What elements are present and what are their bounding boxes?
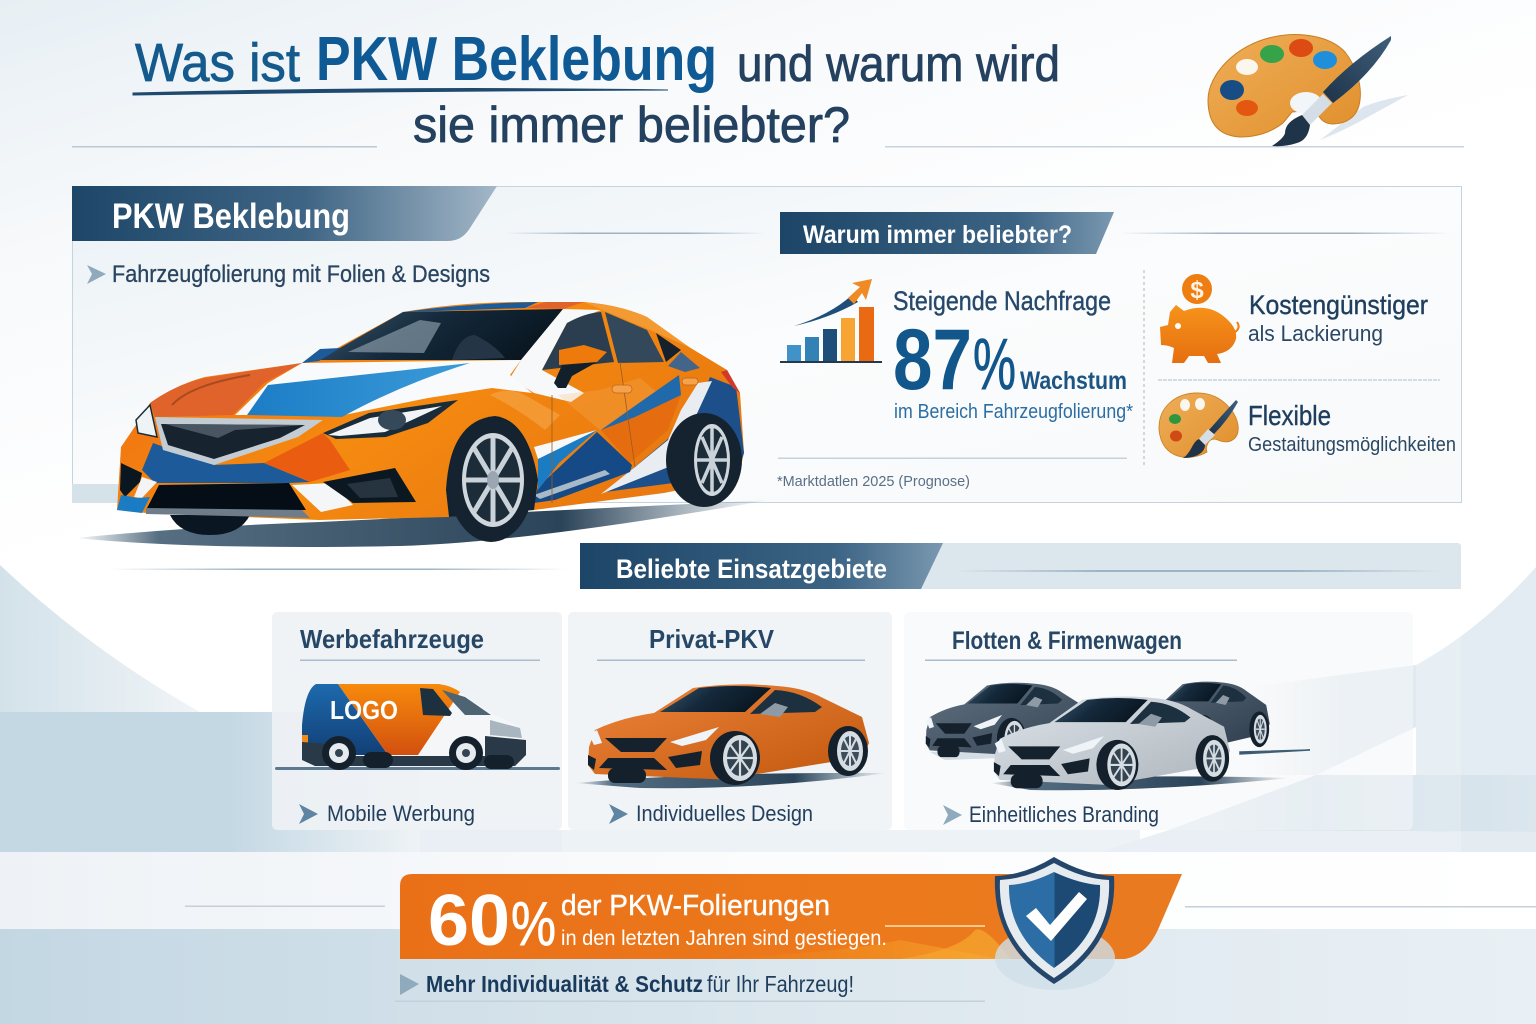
callout: mehr Individualitaet bbox=[395, 971, 985, 1002]
text: kostenguenstiger bbox=[1248, 290, 1428, 346]
icon: palette and brush bbox=[1208, 35, 1408, 146]
heading: Beliebte Einsatzgebiete: Beliebte Einsatzgebiete bbox=[616, 554, 887, 584]
van illustration: LOGO bbox=[330, 695, 398, 725]
grille bbox=[155, 417, 323, 465]
heading: PKW Beklebung bbox=[72, 186, 497, 241]
title bbox=[133, 25, 1060, 153]
title: und warum wird bbox=[737, 36, 1060, 92]
heading: PKW Beklebung: PKW Beklebung bbox=[112, 197, 350, 236]
card: Flotten und Firmenwagen: Flotten & Firmenwagen bbox=[952, 627, 1182, 655]
underbody wheels bbox=[170, 515, 250, 535]
banner: 60 percent: in den letzten Jahren sind gestiegen. bbox=[561, 927, 887, 950]
card: Werbefahrzeuge: Werbefahrzeuge bbox=[300, 624, 484, 654]
white pillar and door front bbox=[510, 309, 601, 402]
title: sie immer beliebter? bbox=[413, 97, 850, 153]
section band bbox=[910, 543, 1461, 589]
side mirror bbox=[554, 345, 607, 388]
text: steigende Nachfrage: Steigende Nachfrage bbox=[893, 286, 1111, 316]
title: PKW Beklebung bbox=[316, 25, 717, 94]
fleet cars bbox=[926, 682, 1310, 790]
header rules bbox=[72, 146, 1464, 148]
section background bbox=[562, 589, 1461, 852]
title: Was ist bbox=[135, 33, 300, 93]
caption: einheitliches Branding: Einheitliches Branding bbox=[969, 802, 1159, 827]
banner: 60 percent: % bbox=[511, 890, 556, 959]
rear wheel bbox=[666, 413, 742, 507]
text: flexible bbox=[1248, 400, 1456, 456]
stat: 87 percent bbox=[893, 312, 1127, 408]
panel: PKW Beklebung bbox=[72, 186, 1462, 503]
text: flexible: Flexible bbox=[1248, 400, 1331, 431]
stat: 87 percent: 87 bbox=[893, 312, 972, 408]
text: kostenguenstiger: als Lackierung bbox=[1248, 321, 1383, 346]
icon: small palette bbox=[1159, 393, 1238, 458]
side graphics bbox=[605, 377, 744, 492]
card: Werbefahrzeuge bbox=[272, 612, 562, 830]
callout: mehr Individualitaet: Mehr Individualität & Schutz bbox=[426, 971, 703, 997]
text: flexible: Gestaitungsmöglichkeiten bbox=[1248, 434, 1456, 456]
banner: 60 percent: 60 bbox=[428, 881, 510, 961]
main car illustration bbox=[75, 302, 770, 547]
footnote: *Marktdatlen 2025 (Prognose) bbox=[777, 473, 970, 490]
text: kostenguenstiger: Kostengünstiger bbox=[1249, 290, 1428, 320]
icon: growth chart bbox=[780, 279, 882, 363]
callout: mehr Individualitaet: für Ihr Fahrzeug! bbox=[707, 971, 854, 997]
front bumper bbox=[142, 443, 310, 483]
card: Flotten und Firmenwagen bbox=[904, 612, 1413, 830]
icon: piggy bank: $ bbox=[1190, 277, 1204, 304]
orange car bbox=[575, 684, 888, 788]
caption: individuelles Design: Individuelles Design bbox=[636, 801, 813, 826]
icon: shield with check bbox=[995, 857, 1115, 990]
hood stripes bbox=[235, 360, 532, 415]
headlights bbox=[323, 400, 458, 439]
caption: mobile Werbung: Mobile Werbung bbox=[327, 801, 475, 826]
icon: piggy bank bbox=[1160, 274, 1239, 363]
subheading: Fahrzeugfolierung: Fahrzeugfolierung mit Folien & Designs bbox=[112, 261, 490, 288]
panel: Beliebte Einsatzgebiete bbox=[110, 543, 1461, 852]
banner: 60 percent: der PKW-Folierungen bbox=[561, 890, 830, 922]
banner: 60 percent bbox=[400, 874, 1182, 961]
front wheel bbox=[446, 416, 538, 542]
car shadow bbox=[75, 500, 770, 547]
body highlights bbox=[490, 391, 560, 430]
side windows bbox=[542, 312, 614, 370]
card: Privat-PKV: Privat-PKV bbox=[649, 624, 775, 654]
text: steigende Nachfrage bbox=[893, 286, 1133, 423]
heading: Warum immer beliebter bbox=[780, 212, 1114, 254]
car body bbox=[117, 302, 744, 520]
windshield bbox=[319, 309, 563, 360]
text: steigende Nachfrage: im Bereich Fahrzeugfolierung* bbox=[894, 401, 1133, 423]
card: Privat-PKV bbox=[568, 612, 892, 830]
panel background bbox=[72, 186, 1462, 502]
van illustration bbox=[275, 684, 560, 770]
stat: 87 percent: % bbox=[973, 325, 1016, 405]
heading: Beliebte Einsatzgebiete bbox=[580, 543, 943, 589]
stat: 87 percent: Wachstum bbox=[1020, 367, 1127, 395]
heading: Warum immer beliebter: Warum immer beliebter? bbox=[803, 221, 1072, 249]
